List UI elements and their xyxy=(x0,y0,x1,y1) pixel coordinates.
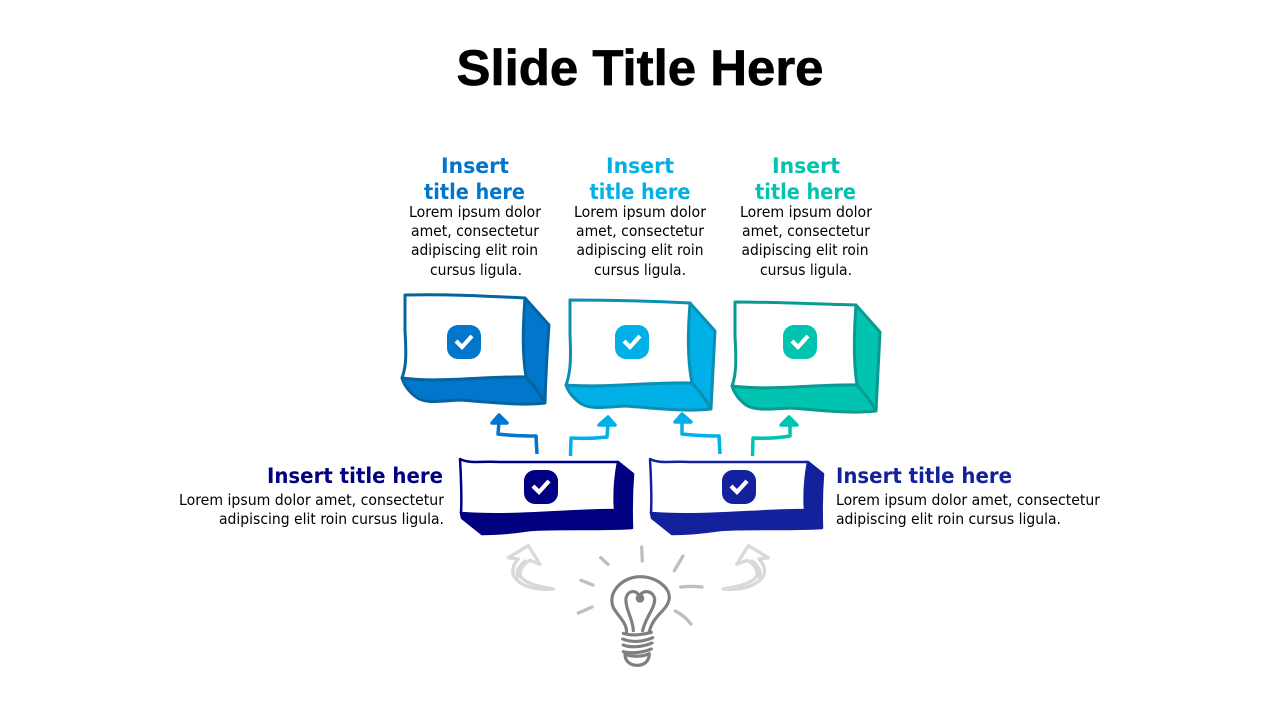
icon: check badge 1 xyxy=(447,325,481,359)
text block: top left: title here xyxy=(424,180,525,204)
text block: lower right: adipiscing elit roin cursus ligula. xyxy=(836,510,1061,528)
text block: top centre xyxy=(574,154,707,279)
panel: box 3 teal xyxy=(732,302,880,412)
text block: top left: cursus ligula. xyxy=(430,261,522,279)
text block: top left xyxy=(409,154,542,279)
icon: check badge 4 xyxy=(524,470,558,504)
text block: top right: adipiscing elit roin xyxy=(742,241,868,259)
text block: top right xyxy=(740,154,873,279)
text block: top centre: Lorem ipsum dolor xyxy=(574,203,707,221)
text block: lower left: Lorem ipsum dolor amet, consectetur xyxy=(179,491,445,509)
text block: top right: cursus ligula. xyxy=(760,261,852,279)
text block: top centre: adipiscing elit roin xyxy=(576,241,704,259)
panel: box 4 navy xyxy=(460,459,633,534)
icon: check badge 5 xyxy=(722,470,756,504)
arrow: blue xyxy=(492,415,537,454)
text block: top centre: Insert xyxy=(606,154,674,178)
panel: box 5 dark blue xyxy=(650,459,823,534)
text block: top centre: title here xyxy=(590,180,690,204)
arrow: grey left xyxy=(508,546,553,589)
text block: top centre: amet, consectetur xyxy=(576,222,705,240)
icon: light rays xyxy=(578,547,702,624)
icon: check badge 3 xyxy=(783,325,817,359)
title: Slide Title Here xyxy=(456,40,824,96)
arrow: grey right xyxy=(723,546,768,589)
text block: top centre: cursus ligula. xyxy=(594,261,686,279)
arrow: teal xyxy=(752,417,797,456)
text block: top right: amet, consectetur xyxy=(742,222,871,240)
text block: top right: Insert xyxy=(772,154,840,178)
text block: lower left: adipiscing elit roin cursus ligula. xyxy=(219,510,444,528)
text block: lower right: Lorem ipsum dolor amet, consectetur xyxy=(836,491,1101,509)
arrow: light blue left xyxy=(570,417,615,456)
arrow: light blue right xyxy=(675,414,720,454)
icon: light bulb xyxy=(612,577,669,665)
text block: top left: amet, consectetur xyxy=(411,222,540,240)
text block: lower right xyxy=(836,464,1101,528)
panel: box 2 light blue xyxy=(566,300,715,410)
text block: lower left xyxy=(179,464,445,528)
text block: top left: adipiscing elit roin xyxy=(411,241,538,259)
icon: check badge 2 xyxy=(615,325,649,359)
text block: top left: Insert xyxy=(441,154,509,178)
text block: top right: Lorem ipsum dolor xyxy=(740,203,873,221)
text block: lower left: Insert title here xyxy=(267,464,443,488)
panel: box 1 blue xyxy=(402,295,549,404)
text block: top left: Lorem ipsum dolor xyxy=(409,203,542,221)
text block: top right: title here xyxy=(755,180,856,204)
text block: lower right: Insert title here xyxy=(836,464,1012,488)
